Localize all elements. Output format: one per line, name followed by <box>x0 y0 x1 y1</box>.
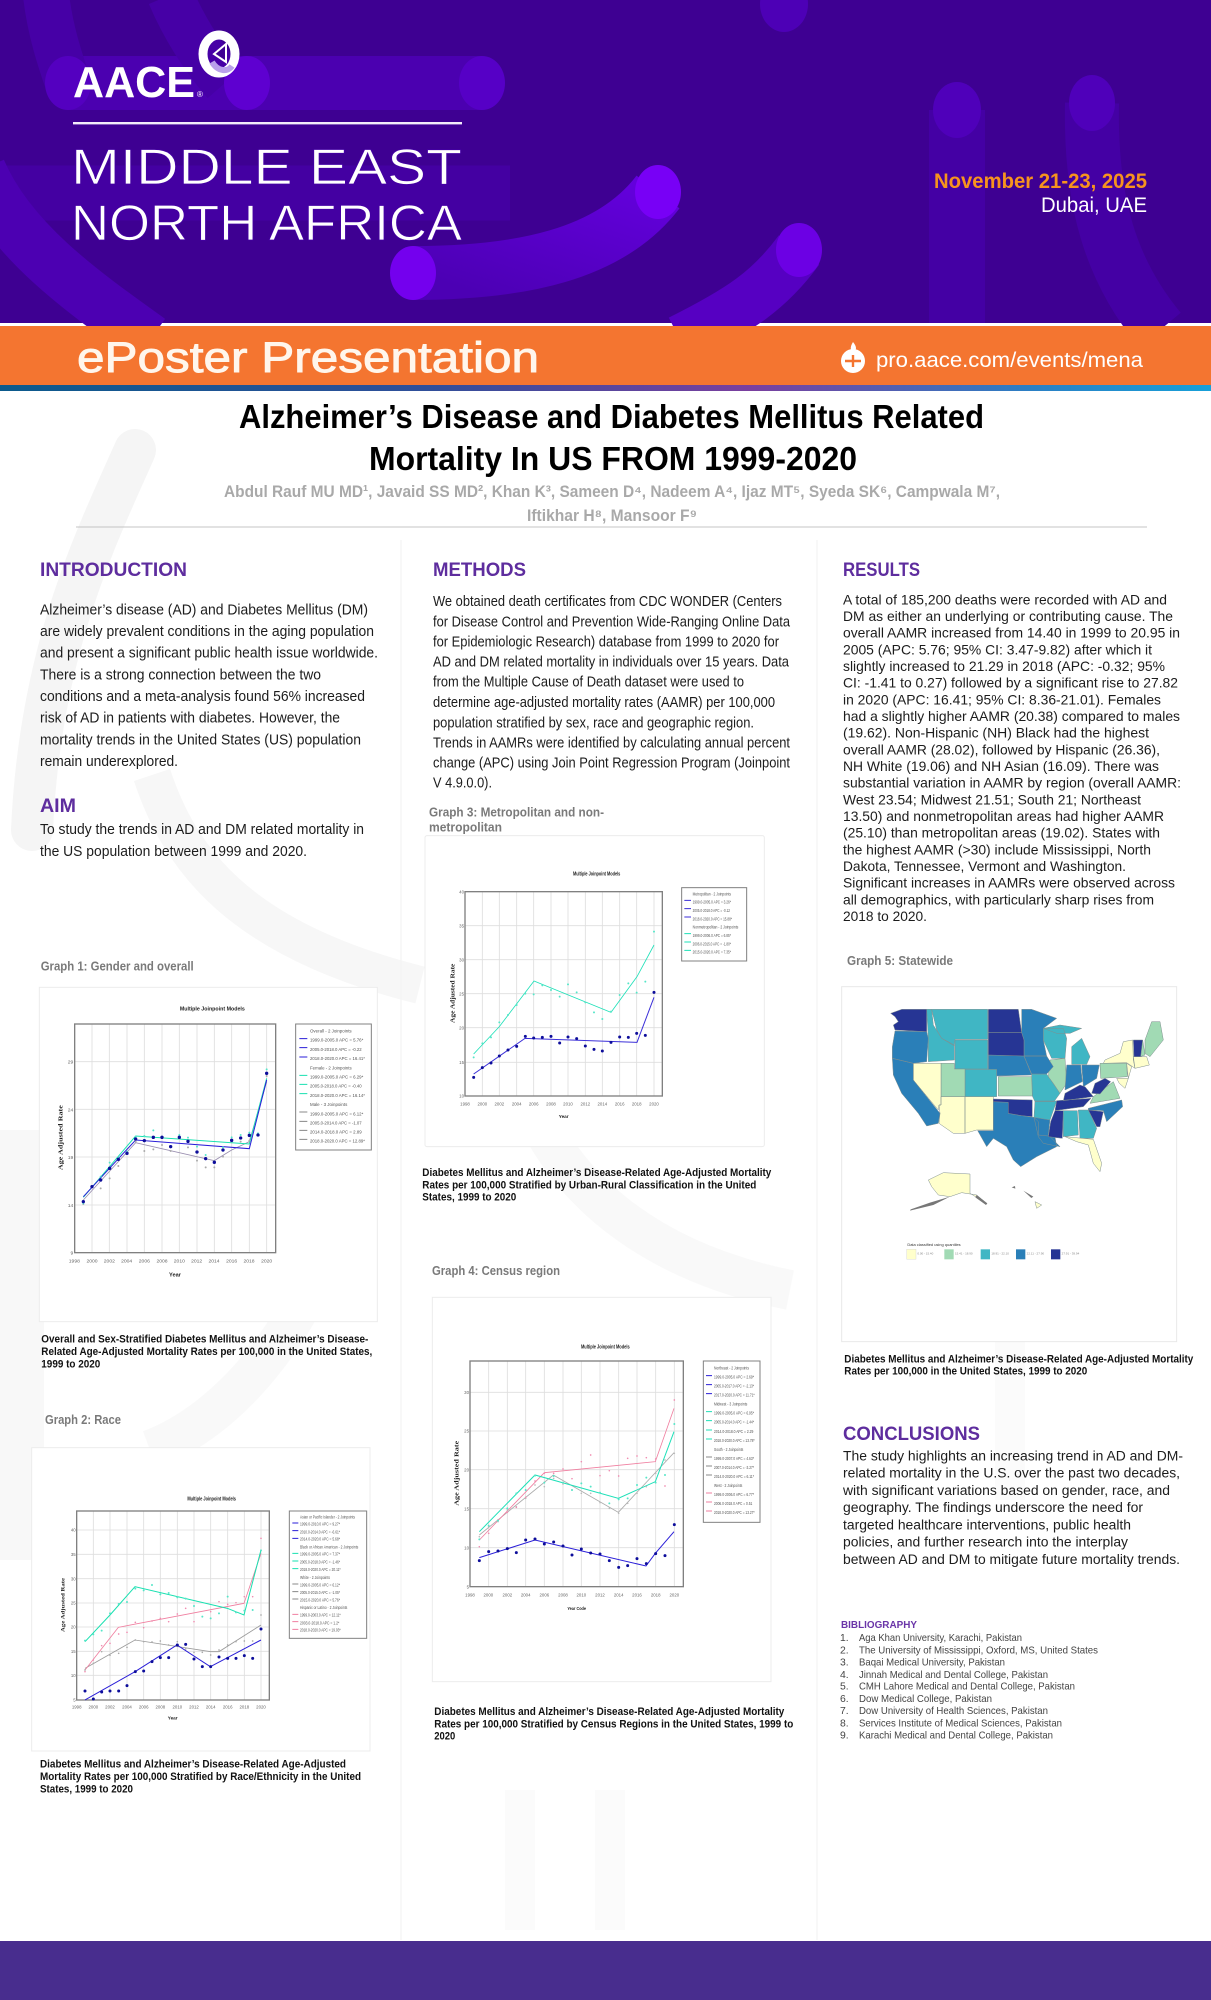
graph 2 chart card: Year <box>168 1716 178 1721</box>
graph 3 chart card: 1998 <box>460 1101 470 1106</box>
panel: methods <box>433 559 790 792</box>
graph 3 chart card: Year <box>559 1114 569 1119</box>
graph 1 legend: 2018.0-2020.0 APC = 16.14* <box>310 1093 365 1099</box>
graph 1 legend: Female - 2 Joinpoints <box>310 1065 352 1071</box>
text: aim body <box>40 822 364 860</box>
graph 4 label: Graph 4: Census region <box>432 1264 560 1278</box>
graph 1 chart card: Multiple Joinpoint Models <box>180 1007 245 1013</box>
US choropleth map <box>891 1009 1163 1211</box>
graph 3 chart card: Age Adjusted Rate <box>450 963 456 1023</box>
graph 5 caption: Rates per 100,000 in the United States, 1999 to 2020 <box>844 1366 1087 1378</box>
graph 2 chart card: 2002 <box>105 1705 115 1710</box>
text: results body: (19.62). Non-Hispanic (NH) Black had the highest <box>843 725 1149 741</box>
text: introduction body: are widely prevalent conditions in the aging population <box>40 624 374 640</box>
text: results body: in 2020 (APC: 16.41; 95% CI: 8.36-21.01). Females <box>843 691 1161 707</box>
text: results body: CI: -1.41 to 0.27) followed by a significant rise to 27.82 <box>843 675 1178 691</box>
graph 4 caption: Diabetes Mellitus and Alzheimer’s Disease-Related Age-Adjusted Mortality <box>434 1706 785 1718</box>
text: introduction body: Alzheimer’s disease (AD) and Diabetes Mellitus (DM) <box>40 602 368 618</box>
graph 2 legend: 2010.0-2014.0 APC = -6.61* <box>300 1529 340 1534</box>
graph 2 chart card: 35 <box>71 1552 76 1557</box>
bibliography list: Aga Khan University, Karachi, Pakistan <box>859 1633 1022 1644</box>
heading: aim: AIM <box>40 795 76 817</box>
graph 1 legend: 2014.0-2018.0 APC = 2.89 <box>310 1130 362 1136</box>
bibliography list: 4. <box>840 1670 849 1681</box>
map legend: 18.91 - 22.10 <box>991 1252 1009 1256</box>
graph 2 legend: 1999.0-2003.0 APC = 12.11* <box>300 1613 341 1618</box>
graph 1 chart card: 2018 <box>243 1259 255 1265</box>
graph 2 legend: White - 2 Joinpoints <box>300 1575 330 1580</box>
graph 3 chart card: 20 <box>459 1025 465 1030</box>
text: methods body: population stratified by sex, race and geographic region. <box>433 715 754 731</box>
graph 3 chart card: 2010 <box>563 1101 573 1106</box>
bibliography list: 8. <box>840 1718 849 1729</box>
graph 4 chart card: 15 <box>464 1506 470 1511</box>
footer band <box>0 1941 1211 2000</box>
graph 2 chart card: 5 <box>73 1698 76 1703</box>
graph 1 chart card: 9 <box>71 1250 74 1256</box>
graph 4 caption <box>434 1706 793 1742</box>
graph 3 legend: 1999.0-2005.0 APC = 3.26* <box>693 900 731 905</box>
graph 3 label: metropolitan <box>429 821 502 835</box>
graph 1 chart card: 2008 <box>156 1259 168 1265</box>
icon: AACE ring <box>203 35 235 73</box>
graph 4 legend: 2017.0-2020.0 APC = 11.71* <box>714 1393 755 1398</box>
logo: AACE wordmark with ring icon: ® <box>197 90 203 99</box>
text: methods body <box>433 594 790 792</box>
graph 3 chart card: 35 <box>459 923 465 928</box>
graph 4 legend: 2014.0-2018.0 APC = 2.29 <box>714 1429 754 1434</box>
text: results body: substantial variation in AAMR by region (overall AAMR: <box>843 775 1181 791</box>
graph 3 label <box>429 806 604 835</box>
graph 4 chart card: 2008 <box>558 1593 568 1598</box>
graph 2 legend: 1999.0-2005.0 APC = 7.37* <box>300 1552 340 1557</box>
divider under logo <box>73 122 462 124</box>
graph 4 legend: 1999.0-2006.0 APC = 6.77* <box>714 1492 754 1497</box>
graph 1 chart card: 2002 <box>104 1259 115 1265</box>
graph 4 chart card: 20 <box>464 1467 470 1472</box>
conference title: MIDDLE EAST <box>71 139 462 195</box>
band URL: pro.aace.com/events/mena <box>876 349 1143 372</box>
panel: graph 5 statewide <box>842 954 1194 1378</box>
graph 2 legend: 2005.0-2015.0 APC = -1.05* <box>300 1590 340 1595</box>
text: conclusions body: between AD and DM to mitigate future mortality trends. <box>843 1552 1180 1568</box>
panel: graph 1 gender and overall <box>39 960 377 1370</box>
bibliography list: Karachi Medical and Dental College, Pakistan <box>859 1730 1053 1741</box>
text: methods body: from the Multiple Cause of Death dataset were used to <box>433 675 744 691</box>
graph 2 legend: 2005.0-2018.0 APC = -1.46* <box>300 1560 340 1565</box>
graph 3 chart card: 30 <box>459 957 465 962</box>
graph 1 legend: Overall - 2 Joinpoints <box>310 1028 352 1034</box>
graph 4 legend: 2005.0-2014.0 APC = -1.44* <box>714 1420 754 1425</box>
text: methods body: change (APC) using Join Point Regression Program (Joinpoint <box>433 755 790 771</box>
text: introduction body: risk of AD in patients with diabetes. However, the <box>40 711 340 727</box>
graph 4 caption: Rates per 100,000 Stratified by Census Regions in the United States, 1999 to <box>434 1718 793 1730</box>
graph 1 legend: 1999.0-2005.0 APC = 5.76* <box>310 1038 363 1044</box>
graph 2 chart card: Multiple Joinpoint Models <box>187 1496 236 1502</box>
graph 3 chart card: 2000 <box>478 1101 488 1106</box>
text: methods body: Trends in AAMRs were identified by calculating annual percent <box>433 735 790 751</box>
graph 3 chart card: 2012 <box>581 1101 591 1106</box>
text: results body: 2018 to 2020. <box>843 908 927 924</box>
text: conclusions body: related mortality in the U.S. over the past two decades, <box>843 1466 1180 1482</box>
graph 1 caption <box>41 1334 372 1370</box>
heading: introduction: INTRODUCTION <box>40 559 187 581</box>
text: results body: Dakota, Tennessee, Vermont and Washington. <box>843 858 1126 874</box>
graph 2 legend: 1999.0-2010.0 APC = 9.27* <box>300 1521 340 1526</box>
graph 5 label: Graph 5: Statewide <box>847 954 953 968</box>
map legend <box>907 1243 1080 1259</box>
graph 3 legend: 2006.0-2015.0 APC = -1.80* <box>693 941 731 946</box>
graph 4 chart card: 25 <box>464 1429 470 1434</box>
header banner <box>0 0 1211 340</box>
graph 1 legend: 2018.0-2020.0 APC = 16.41* <box>310 1056 365 1062</box>
graph 3 legend: 2015.0-2020.0 APC = 7.35* <box>693 950 731 955</box>
panel: graph 4 census region <box>432 1264 793 1742</box>
map legend: Data classified using quantiles <box>907 1243 961 1247</box>
graph 2 caption: Mortality Rates per 100,000 Stratified by Race/Ethnicity in the United <box>40 1771 361 1783</box>
bibliography list: Jinnah Medical and Dental College, Pakistan <box>859 1670 1048 1681</box>
date and location: Dubai, UAE <box>1041 194 1147 217</box>
graph 1 chart card: 2020 <box>261 1259 272 1265</box>
graph 3 legend: 2018.0-2020.0 APC = 15.88* <box>693 916 732 921</box>
graph 4 legend: 2014.0-2020.0 APC = 6.11* <box>714 1474 754 1479</box>
graph 3 label: Graph 3: Metropolitan and non- <box>429 806 604 820</box>
graph 2 chart card: 40 <box>71 1528 76 1533</box>
graph 4 chart card: 2018 <box>651 1593 661 1598</box>
graph 2 chart card: 20 <box>71 1625 76 1630</box>
graph 4 legend: 1999.0-2005.0 APC = 6.95* <box>714 1411 754 1416</box>
graph 3 caption: Rates per 100,000 Stratified by Urban-Rural Classification in the United <box>422 1179 756 1191</box>
band title: ePoster Presentation <box>77 334 539 382</box>
text: conclusions body: policies, and further research into the interplay <box>843 1535 1129 1551</box>
panel: conclusions <box>842 1423 1183 1568</box>
map legend: 22.11 - 27.90 <box>1027 1252 1044 1256</box>
graph 1 chart card: 19 <box>68 1155 74 1161</box>
bibliography list: 9. <box>840 1730 849 1741</box>
graph 1 chart card: 24 <box>68 1107 74 1113</box>
text: conclusions body: targeted healthcare interventions, public health <box>843 1517 1131 1533</box>
graph 4 chart card: 2014 <box>614 1593 624 1598</box>
graph 4 legend <box>703 1361 760 1522</box>
heading: bibliography: BIBLIOGRAPHY <box>841 1619 917 1631</box>
graph 4 chart card: 2006 <box>540 1593 550 1598</box>
bibliography list: 5. <box>840 1682 849 1693</box>
graph 3 chart card: 2004 <box>512 1101 522 1106</box>
graph 1 chart card: Year <box>169 1273 182 1279</box>
text: methods body: V 4.9.0.0). <box>433 776 492 792</box>
panel: graph 2 race <box>32 1413 370 1795</box>
date and location: November 21-23, 2025 <box>934 170 1147 193</box>
graph 4 chart card: 2016 <box>632 1593 642 1598</box>
graph 4 chart card: 2002 <box>503 1593 513 1598</box>
bibliography list: 3. <box>840 1658 849 1669</box>
graph 2 legend: 2003.0-2018.0 APC = 1.2* <box>300 1620 340 1625</box>
orange presentation band <box>0 326 1211 391</box>
text: introduction body: and present a significant public health issue worldwide. <box>40 646 378 662</box>
graph 3 chart card <box>425 836 764 1147</box>
graph 2 chart card: 30 <box>71 1576 76 1581</box>
graph 2 chart card: 2010 <box>173 1705 183 1710</box>
graph 1 chart card: 2016 <box>226 1259 237 1265</box>
map legend: 15.41 - 18.90 <box>955 1252 973 1256</box>
graph 3 caption: States, 1999 to 2020 <box>422 1192 516 1204</box>
graph 2 chart card: 25 <box>71 1601 76 1606</box>
graph 3 chart card: 40 <box>459 889 465 894</box>
graph 2 caption <box>40 1759 361 1795</box>
graph 3 legend: 1999.0-2006.0 APC = 6.85* <box>693 933 731 938</box>
graph 3 legend: Nonmetropolitan - 2 Joinpoints <box>693 925 738 930</box>
graph 4 chart card <box>432 1297 771 1682</box>
graph 2 chart card <box>32 1448 370 1751</box>
graph 1 chart card: 2006 <box>139 1259 150 1265</box>
graph 2 legend: Hispanic or Latino - 2 Joinpoints <box>300 1605 347 1610</box>
graph 1 label: Graph 1: Gender and overall <box>41 960 194 974</box>
graph 4 chart card: Multiple Joinpoint Models <box>581 1344 630 1350</box>
graph 1 chart card: 2000 <box>86 1259 98 1265</box>
graph 4 chart card: Year Code <box>567 1606 586 1611</box>
logo: AACE wordmark with ring icon: AACE <box>73 58 195 107</box>
graph 3 chart card: 2018 <box>632 1101 642 1106</box>
graph 1 chart card: 2012 <box>191 1259 202 1265</box>
graph 5 map card <box>842 987 1177 1342</box>
text: introduction body: remain underexplored. <box>40 754 178 770</box>
graph 2 legend <box>289 1511 367 1638</box>
text: results body: DM as either an underlying or contributing cause. The <box>843 608 1173 624</box>
graph 3 caption <box>422 1167 772 1204</box>
graph 1 caption: Overall and Sex-Stratified Diabetes Mellitus and Alzheimer’s Disease- <box>41 1334 369 1346</box>
text: results body: (25.10) than metropolitan areas (19.02). States with <box>843 825 1160 841</box>
poster title: Mortality In US FROM 1999-2020 <box>369 440 857 477</box>
graph 3 chart card: 10 <box>459 1094 465 1099</box>
bibliography list: Dow University of Health Sciences, Pakistan <box>859 1706 1048 1717</box>
graph 1 chart card: 2004 <box>121 1259 132 1265</box>
authors: Iftikhar H⁸, Mansoor F⁹ <box>527 506 697 525</box>
heading: methods: METHODS <box>433 559 526 581</box>
graph 4 chart card: 2000 <box>484 1593 494 1598</box>
graph 2 chart card: 2020 <box>256 1705 266 1710</box>
graph 2 legend: 2014.0-2020.0 APC = 5.68* <box>300 1537 340 1542</box>
graph 1 chart card: Age Adjusted Rate <box>58 1105 65 1170</box>
poster title: Alzheimer’s Disease and Diabetes Mellitus Related <box>239 398 984 435</box>
bibliography list: 2. <box>840 1645 849 1656</box>
graph 1 chart card: 14 <box>68 1203 74 1209</box>
text: methods body: for Epidemiologic Research) database from 1999 to 2020 for <box>433 635 779 651</box>
graph 3 legend <box>682 888 747 961</box>
graph 1 legend: 1999.0-2005.0 APC = 6.29* <box>310 1075 363 1081</box>
graph 4 chart card: 2010 <box>577 1593 587 1598</box>
conference title <box>71 139 463 251</box>
graph 2 chart card: 10 <box>71 1673 76 1678</box>
graph 2 chart card: 2008 <box>156 1705 166 1710</box>
graph 3 chart card: 2006 <box>529 1101 539 1106</box>
graph 1 caption: Related Age-Adjusted Mortality Rates per 100,000 in the United States, <box>41 1346 372 1358</box>
graph 2 label: Graph 2: Race <box>45 1413 121 1427</box>
graph 2 chart card: 2000 <box>89 1705 99 1710</box>
graph 3 chart card: 2014 <box>598 1101 608 1106</box>
graph 4 legend: 2018.0-2020.0 APC = 13.78* <box>714 1438 755 1443</box>
text: results body: had a slightly higher AAMR (20.38) compared to males <box>843 708 1180 724</box>
text: results body: overall AAMR (28.02), followed by Hispanic (26.36), <box>843 741 1160 757</box>
authors: Abdul Rauf MU MD¹, Javaid SS MD², Khan K³, Sameen D⁴, Nadeem A⁴, Ijaz MT⁵, Syeda SK⁶, Campwala M⁷, <box>224 482 1000 501</box>
text: introduction body <box>40 602 378 770</box>
graph 4 legend: 1999.0-2007.0 APC = 4.63* <box>714 1456 754 1461</box>
text: methods body: determine age-adjusted mortality rates (AAMR) per 100,000 <box>433 695 775 711</box>
graph 4 chart card: 10 <box>464 1545 470 1550</box>
heading: conclusions: CONCLUSIONS <box>843 1423 980 1445</box>
graph 4 chart card: 2004 <box>521 1593 531 1598</box>
graph 2 legend: 2018.0-2020.0 APC = 20.11* <box>300 1567 341 1572</box>
graph 3 legend: 2005.0-2018.0 APC = -0.12 <box>693 908 730 913</box>
text: results body <box>843 591 1181 924</box>
text: results body: 2005 (APC: 5.76; 95% CI: 3.47-9.82) after which it <box>843 641 1152 657</box>
graph 1 chart card: 2014 <box>208 1259 220 1265</box>
text: introduction body: mortality trends in the United States (US) population <box>40 732 361 748</box>
graph 1 legend: Male - 3 Joinpoints <box>310 1102 348 1108</box>
graph 1 legend: 2005.0-2014.0 APC = -1.07 <box>310 1121 362 1127</box>
graph 3 chart card: 2008 <box>546 1101 556 1106</box>
graph 3 caption: Diabetes Mellitus and Alzheimer’s Disease-Related Age-Adjusted Mortality <box>422 1167 772 1179</box>
graph 2 legend: Black or African American - 2 Joinpoints <box>300 1544 358 1549</box>
graph 4 legend: 2018.0-2020.0 APC = 13.27* <box>714 1510 755 1515</box>
text: conclusions body: geography. The findings underscore the need for <box>843 1500 1143 1516</box>
graph 4 chart card: Age Adjusted Rate <box>453 1441 460 1506</box>
graph 1 caption: 1999 to 2020 <box>41 1358 100 1370</box>
text: results body: Significant increases in AAMRs were observed across <box>843 875 1175 891</box>
graph 2 chart card: 2014 <box>206 1705 216 1710</box>
text: introduction body: conditions and a meta-analysis found 56% increased <box>40 689 365 705</box>
text: methods body: for Disease Control and Prevention Wide-Ranging Online Data <box>433 614 790 630</box>
text: results body: NH White (19.06) and NH Asian (16.09). There was <box>843 758 1159 774</box>
graph 4 chart card: 2020 <box>670 1593 680 1598</box>
panel: bibliography <box>840 1619 1098 1741</box>
heading: results: RESULTS <box>843 559 920 581</box>
panel: aim <box>40 795 364 860</box>
graph 2 caption: Diabetes Mellitus and Alzheimer’s Disease-Related Age-Adjusted <box>40 1759 346 1771</box>
graph 1 chart card: 1998 <box>69 1259 80 1265</box>
bibliography list: CMH Lahore Medical and Dental College, Pakistan <box>859 1682 1075 1693</box>
graph 4 legend: 2006.0-2018.0 APC = 0.51 <box>714 1501 753 1506</box>
graph 4 legend: Midwest - 3 Joinpoints <box>714 1402 747 1407</box>
graph 3 chart card: 2016 <box>615 1101 625 1106</box>
graph 1 chart card: 2010 <box>174 1259 185 1265</box>
text: conclusions body <box>842 1448 1183 1568</box>
bibliography list: Services Institute of Medical Sciences, Pakistan <box>859 1718 1062 1729</box>
graph 4 caption: 2020 <box>434 1730 455 1742</box>
text: methods body: We obtained death certificates from CDC WONDER (Centers <box>433 594 782 610</box>
graph 4 chart card: 2012 <box>595 1593 605 1598</box>
graph 2 chart card: Age Adjusted Rate <box>61 1577 67 1632</box>
graph 1 chart card: 29 <box>68 1060 74 1066</box>
graph 1 legend: 2005.0-2018.0 APC = -0.40 <box>310 1084 362 1090</box>
graph 4 chart card: 5 <box>467 1584 470 1589</box>
panel: introduction <box>40 559 378 770</box>
graph 4 legend: 2005.0-2017.0 APC = -2.13* <box>714 1384 754 1389</box>
graph 4 legend: Northeast - 2 Joinpoints <box>714 1365 749 1370</box>
graph 2 chart card: 2012 <box>189 1705 199 1710</box>
conference title: NORTH AFRICA <box>71 195 463 251</box>
graph 2 chart card: 2006 <box>139 1705 149 1710</box>
icon: globe pin <box>841 342 865 373</box>
bibliography list <box>840 1633 1098 1741</box>
graph 1 chart card <box>39 987 377 1322</box>
text: results body: all demographics, with particularly sharp rises from <box>843 891 1154 907</box>
text: conclusions body: The study highlights an increasing trend in AD and DM- <box>843 1448 1183 1464</box>
graph 2 legend: 1999.0-2005.0 APC = 6.12* <box>300 1583 340 1588</box>
graph 4 chart card: 1998 <box>465 1593 475 1598</box>
map legend: 27.91 - 39.94 <box>1062 1252 1080 1256</box>
graph 3 chart card: 15 <box>459 1060 465 1065</box>
text: conclusions body: with significant variations based on gender, race, and <box>842 1483 1170 1499</box>
text: results body: West 23.54; Midwest 21.51; South 21; Northeast <box>843 791 1141 807</box>
graph 2 chart card: 15 <box>71 1649 76 1654</box>
graph 5 caption <box>844 1354 1194 1378</box>
graph 3 chart card: Multiple Joinpoint Models <box>573 872 620 878</box>
bibliography list: The University of Mississippi, Oxford, MS, United States <box>859 1645 1098 1656</box>
graph 1 legend: 2018.0-2020.0 APC = 12.89* <box>310 1139 365 1145</box>
graph 2 legend: 2018.0-2020.0 APC = 19.03* <box>300 1628 341 1633</box>
text: results body: A total of 185,200 deaths were recorded with AD and <box>843 591 1167 607</box>
poster title <box>239 398 984 477</box>
bibliography list: 6. <box>840 1694 849 1705</box>
map legend: 0.00 - 15.40 <box>917 1252 934 1256</box>
panel: results <box>843 559 1181 924</box>
text: results body: slightly increased to 21.29 in 2018 (APC: -0.32; 95% <box>843 658 1165 674</box>
graph 2 chart card: 2004 <box>122 1705 132 1710</box>
text: aim body: the US population between 1999 and 2020. <box>40 844 307 860</box>
graph 2 chart card: 2018 <box>240 1705 250 1710</box>
authors <box>224 482 1000 525</box>
graph 2 legend: 2015.0-2020.0 APC = 5.76* <box>300 1598 340 1603</box>
graph 2 legend: Asian or Pacific Islander - 2 Joinpoints <box>300 1514 355 1519</box>
panel: graph 3 metropolitan <box>422 806 772 1204</box>
text: aim body: To study the trends in AD and DM related mortality in <box>40 822 364 838</box>
text: introduction body: There is a strong connection between the two <box>40 667 321 683</box>
graph 4 legend: West - 2 Joinpoints <box>714 1483 742 1488</box>
graph 2 caption: States, 1999 to 2020 <box>40 1783 133 1795</box>
bibliography list: Dow Medical College, Pakistan <box>859 1694 992 1705</box>
graph 4 legend: 1999.0-2005.0 APC = 2.69* <box>714 1375 754 1380</box>
logo: AACE wordmark with ring icon <box>73 35 235 107</box>
graph 3 chart card: 2002 <box>495 1101 505 1106</box>
text: results body: 13.50) and nonmetropolitan areas had higher AAMR <box>843 808 1164 824</box>
graph 4 chart card: 30 <box>464 1390 470 1395</box>
graph 2 chart card: 2016 <box>223 1705 233 1710</box>
graph 1 legend: 1999.0-2005.0 APC = 6.12* <box>310 1111 363 1117</box>
graph 3 chart card: 25 <box>459 991 465 996</box>
graph 3 chart card: 2020 <box>649 1101 659 1106</box>
text: results body: overall AAMR increased from 14.40 in 1999 to 20.95 in <box>843 625 1180 641</box>
graph 1 legend: 2005.0-2018.0 APC = -0.22 <box>310 1047 362 1053</box>
graph 4 legend: 2007.0-2014.0 APC = -3.27* <box>714 1465 754 1470</box>
graph 1 legend <box>296 1024 371 1150</box>
date and location <box>934 170 1147 217</box>
bibliography list: 7. <box>840 1706 849 1717</box>
bibliography list: Baqai Medical University, Pakistan <box>859 1658 1005 1669</box>
bibliography list: 1. <box>840 1633 849 1644</box>
graph 3 legend: Metropolitan - 2 Joinpoints <box>693 891 731 896</box>
graph 2 chart card: 1998 <box>72 1705 82 1710</box>
graph 4 legend: South - 2 Joinpoints <box>714 1447 743 1452</box>
text: results body: the highest AAMR (>30) include Mississippi, North <box>843 841 1151 857</box>
text: methods body: AD and DM related mortality in individuals over 15 years. Data <box>433 655 789 671</box>
